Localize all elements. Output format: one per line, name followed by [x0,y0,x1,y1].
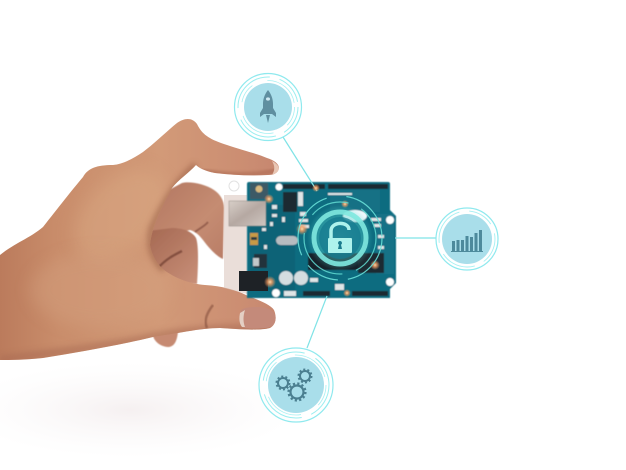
glow disc [307,205,373,271]
gear right [300,371,310,381]
icon: gears badge [259,348,333,422]
white highlight on board [343,210,367,222]
silver crystal [276,236,298,245]
icon: rocket badge [234,74,302,140]
fold shadow [150,165,196,270]
gear center [290,386,304,398]
thick ring [314,212,366,264]
finger crease shadow [158,251,182,268]
board body [247,182,396,298]
soft floor shadow [0,362,300,458]
reset button [250,183,268,199]
lock shackle [331,223,349,238]
middle finger [150,182,224,259]
outer arcs [298,196,382,280]
inner disc [319,217,361,259]
voltage regulator [254,254,267,268]
hand: back fingers [140,182,224,347]
transparent acrylic plate [224,181,247,294]
gear left [278,378,288,388]
connector lines [283,137,436,348]
hand: palm and thumb [0,119,279,360]
small components [262,192,384,296]
keyhole [338,241,342,249]
top pin headers [283,184,325,189]
glowing sparks [264,184,380,297]
mounting holes [276,184,282,190]
knuckle crease on thumb [206,305,213,328]
capacitors [279,271,293,285]
USB connector [229,201,266,226]
fingernail on index finger [272,161,279,175]
rocket glyph [260,90,276,123]
palm highlight [36,271,66,308]
ring finger [140,228,198,284]
icon: bar chart badge [436,208,498,270]
infographic scene [0,72,499,426]
main chip [308,253,376,270]
power jack [239,271,268,291]
knuckle highlight [79,180,144,250]
lock body [328,238,352,253]
upper fingertip shade [200,170,278,174]
board texture [250,205,295,290]
pinky fingertip [153,332,178,347]
microcontroller board [247,182,396,298]
security lock hologram [298,196,382,280]
lower edge shade [0,328,270,360]
bars [451,230,483,252]
amber capacitors [250,233,258,245]
bottom pin headers [303,291,330,296]
thumb nail [239,307,276,329]
ICSP header [283,192,297,212]
